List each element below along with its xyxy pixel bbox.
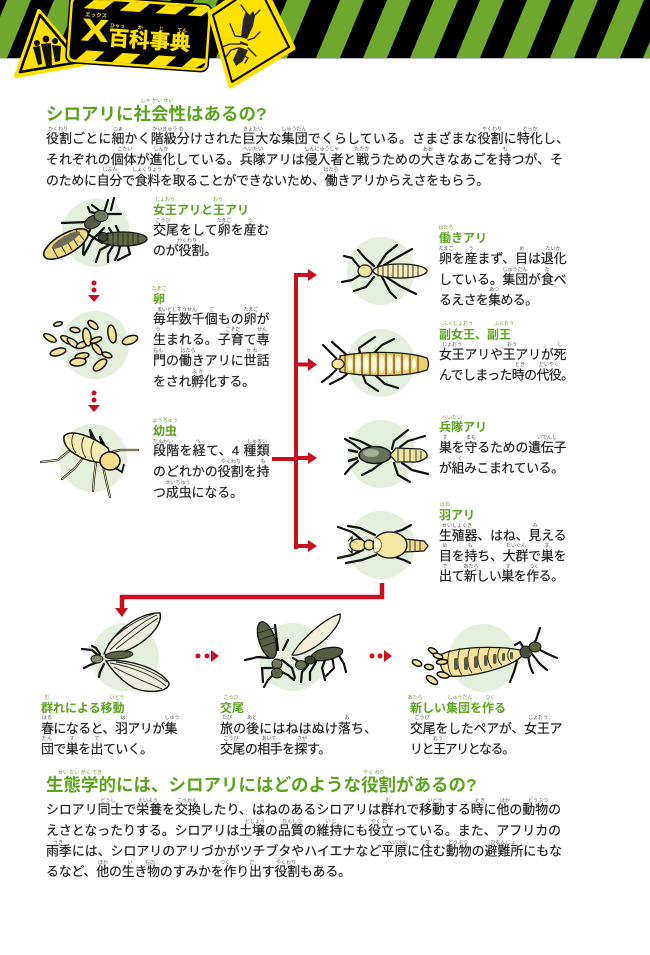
description (153, 438, 270, 500)
arrow: egg to larva (88, 390, 100, 412)
body text: い じ (325, 819, 337, 825)
heading (439, 320, 514, 342)
body text: いどう (427, 797, 443, 804)
description: こうび (155, 217, 171, 224)
body text: シロアリ同士で栄養を交換したり、はねのあるシロアリは群れで移動する時に他の動物の (46, 802, 561, 817)
intro text: それぞれの個体が進化している。兵隊アリは侵入者と戦うための大きなあごを持つが、そ (46, 152, 563, 167)
description: 毎年数千個もの卵が (153, 312, 270, 326)
icon: warning diamond with termite (210, 0, 293, 86)
description: う (155, 327, 161, 333)
description: す (505, 564, 511, 570)
panel: substitute queen and king (322, 320, 574, 397)
icon: warning triangle with group of people (16, 11, 84, 76)
heading (153, 196, 249, 217)
description: もん (153, 348, 163, 354)
description: せいしょくき (442, 522, 472, 529)
title text: エックス (85, 10, 108, 20)
description: う (247, 218, 253, 224)
icon: queen laying eggs (411, 624, 557, 692)
icon: winged termite (338, 511, 428, 579)
heading: やく わり (363, 769, 385, 776)
description: 生殖器、はね、見える (439, 528, 566, 543)
description: す (544, 543, 550, 549)
heading: 働きアリ (439, 230, 487, 245)
intro text: じぶん (102, 167, 118, 173)
description (410, 714, 562, 756)
description: み (532, 523, 538, 529)
body text: ほか (500, 797, 510, 804)
body text: む (385, 798, 391, 804)
title text: てん (177, 28, 187, 34)
heading: 幼虫 (153, 423, 177, 438)
intro text: きょだい (243, 126, 263, 132)
description: しゅるい (247, 439, 267, 445)
intro text (46, 126, 569, 188)
heading: じょおう (155, 196, 175, 203)
heading: シロアリに社会性はあるの? (46, 104, 267, 124)
heading: 羽アリ (439, 508, 475, 522)
heading: 兵隊アリ (439, 419, 487, 434)
intro text: と (175, 167, 181, 173)
intro text: はたら (324, 167, 338, 173)
heading (439, 225, 487, 245)
intro text: しんか (153, 146, 169, 152)
body text: 雨季には、シロアリのアリづかがツチブタやハイエナなど平原に住む動物の避難所にもな (46, 844, 562, 858)
intro text: かいきゅう わ (152, 126, 184, 132)
description: せん (257, 327, 267, 333)
intro text: かくわり (48, 126, 68, 132)
description: たまご (439, 245, 453, 252)
description: だいやく (539, 361, 559, 368)
body text: えいよう (138, 798, 158, 804)
description: 交尾をしたペアが、女王ア (410, 721, 562, 736)
heading: はたら (439, 225, 453, 231)
body text: るなど、他の生き物のすみかを作り出す役割もある。 (46, 864, 351, 879)
description (439, 435, 567, 476)
body text: どうぶつ (448, 839, 468, 846)
icon: larva (41, 424, 138, 497)
heading: ふくおう (494, 320, 514, 327)
heading: 交尾 (220, 701, 244, 715)
heading: たまご (152, 285, 166, 292)
icon: soldier termite (345, 420, 428, 488)
description: のが役割。 (153, 243, 217, 258)
heading: 副女王、副王 (439, 326, 511, 342)
description: せ わ (246, 347, 258, 354)
body text: とき (475, 797, 485, 804)
arrow: queen to egg (88, 280, 100, 302)
description: おう (507, 341, 517, 348)
description: たび (222, 714, 232, 721)
intro text: も (502, 146, 508, 152)
heading (152, 418, 178, 438)
description: 春になると、羽アリが集 (41, 721, 178, 736)
description: とき (515, 361, 525, 368)
arrow: larva branches to four castes (272, 269, 317, 552)
description: 門の働きアリに世話 (153, 353, 270, 368)
description: が組みこまれている。 (439, 460, 564, 476)
description: つ成虫になる。 (153, 485, 243, 500)
arrow: swarm to mating (196, 650, 219, 662)
description: し (557, 342, 563, 348)
description: つく (529, 564, 539, 570)
description: たいぐん (506, 543, 526, 549)
description: は (120, 715, 126, 721)
body text: えさとなったりする。シロアリは土壌の品質の維持にも役立っている。また、アフリカの (46, 823, 561, 838)
description (153, 217, 270, 258)
body text: やくわり (276, 859, 296, 866)
description: 巣を守るための遺伝子 (439, 440, 567, 455)
description: 団で巣を出ていく。 (41, 742, 153, 756)
description: やくわり (221, 458, 241, 465)
description: 女王アリや王アリが死 (439, 347, 567, 362)
heading (220, 694, 244, 715)
description: 段階を経て、4 種類 (153, 443, 270, 458)
heading: 生態学的には、シロアリにはどのような役割があるの? (46, 775, 477, 795)
description: 卵を産まず、目は退化 (439, 251, 567, 266)
description: こうび (414, 714, 430, 721)
title text: か (138, 24, 143, 31)
heading (407, 695, 506, 715)
description: るえさを集める。 (439, 292, 538, 308)
title text: じ (159, 26, 164, 33)
body text: うき (53, 839, 63, 846)
description: せいちゅう (165, 480, 191, 486)
title text: X (81, 12, 110, 49)
heading: ようちゅう (152, 418, 178, 424)
heading: 女王アリと王アリ (153, 202, 249, 217)
description: 交尾の相手を探す。 (220, 742, 331, 756)
heading: こうび (223, 694, 239, 701)
description (153, 306, 270, 389)
heading: しゃ かい せい (141, 97, 173, 104)
intro text: こたい (117, 146, 133, 152)
description: だんかい (153, 438, 173, 445)
body text: す (425, 840, 431, 846)
heading: 群れによる移動 (41, 700, 125, 715)
description (439, 245, 567, 308)
description: たまご (217, 217, 231, 224)
description: う (468, 246, 474, 252)
description: こそだ (225, 326, 241, 333)
description: じょおう (528, 714, 548, 721)
description: で (94, 736, 100, 742)
intro text: やくわり (482, 126, 502, 132)
description: たいか (545, 245, 561, 252)
icon: queen and king termites (39, 198, 147, 267)
description: いでんし (537, 435, 557, 441)
description (439, 341, 574, 382)
body text: へいげん (387, 839, 407, 846)
heading: しゅうだん (447, 695, 473, 701)
description: へ (195, 439, 201, 445)
intro text: のために自分で食料を取ることができないため、働きアリからえさをもらう。 (46, 173, 489, 188)
description: こ (209, 307, 215, 313)
icon: winged termite in flight (82, 613, 169, 691)
body text: もの (145, 860, 155, 866)
description: く (457, 456, 463, 462)
description (41, 715, 180, 756)
title sign (65, 0, 213, 73)
panel: egg (42, 285, 270, 389)
heading: ふくじょおう (443, 320, 473, 327)
description: たまご (244, 306, 258, 313)
intro text: おお (423, 146, 433, 152)
description: ふ か (192, 368, 204, 375)
description: め (519, 246, 525, 252)
description: す (69, 736, 75, 742)
description: あいて (262, 736, 276, 742)
description: あつ (489, 287, 499, 293)
body text (46, 797, 562, 879)
icon: eggs (42, 311, 139, 379)
icon: mating pair (245, 614, 346, 691)
body text: だ (249, 860, 255, 866)
description: も (467, 543, 473, 549)
body text: い (127, 860, 133, 866)
description: 交尾をして卵を産む (153, 222, 270, 238)
description: だん (42, 736, 52, 742)
description (220, 714, 377, 756)
header band: hazard stripes (0, 0, 650, 59)
intro text: へいたい (243, 146, 263, 152)
description: はたら (181, 348, 195, 354)
description: まいとしすうせん (157, 307, 197, 313)
panel: soldier (345, 415, 567, 488)
description: 目を持ち、大群で巣を (439, 548, 566, 564)
description: さが (297, 735, 307, 742)
description: あと (247, 715, 257, 721)
body text: やく た (371, 818, 387, 825)
description: かくわり (177, 237, 197, 244)
section: ecological role (46, 769, 562, 879)
description: 生まれる。子育て専 (153, 332, 270, 347)
panel: founding a new colony (407, 624, 562, 756)
heading: む (44, 695, 50, 701)
description (439, 522, 566, 584)
body text: ひんしつ (282, 819, 302, 825)
title text: 百科事典 (108, 27, 191, 56)
heading: へいたい (442, 415, 462, 421)
arrow: mating to new colony (370, 650, 392, 662)
description: をされ孵化する。 (153, 374, 255, 389)
intro text: たたか (354, 146, 370, 152)
description: リと王アリとなる。 (410, 742, 515, 756)
description: しゅうだん (502, 267, 528, 273)
description: している。集団が食べ (439, 272, 567, 287)
heading: 卵 (153, 291, 165, 306)
description: す (442, 435, 448, 441)
panel: larva (41, 418, 270, 500)
heading: せい たい がく てき (58, 769, 102, 776)
panel: worker (342, 225, 567, 308)
description: じょおう (442, 341, 462, 348)
heading: いどう (109, 694, 125, 701)
icon: worker termite (342, 237, 427, 305)
description: あたら (463, 564, 479, 570)
intro text: しょくりょう (132, 167, 162, 173)
body text: どうぶつ (528, 797, 548, 804)
heading: おう (213, 196, 223, 203)
description: 旅の後にはねはぬけ落ち、 (220, 721, 377, 736)
description: まも (466, 435, 476, 441)
body text: どうし (100, 797, 116, 804)
intro text: とっか (523, 126, 537, 132)
heading (152, 285, 166, 306)
heading: 新しい集団を作る (410, 700, 506, 715)
description: のどれかの役割を持 (153, 464, 270, 479)
arrow: winged termites to swarm (115, 583, 382, 617)
section: social nature of termites (46, 97, 569, 188)
body text: どじょう (245, 818, 265, 825)
icon: substitute reproductive termite (322, 329, 428, 397)
panel: swarming flight (41, 613, 180, 756)
body text: こうかん (177, 797, 197, 804)
description: お (344, 714, 350, 721)
description: こうび (223, 735, 239, 742)
description: め (442, 543, 448, 549)
intro text: 役割ごとに細かく階級分けされた巨大な集団でくらしている。さまざまな役割に特化し、 (46, 131, 569, 146)
description: も (260, 459, 266, 465)
description: た (544, 267, 550, 273)
title text (81, 10, 192, 56)
title text: ひゃっ (110, 23, 125, 30)
panel: queen and king (39, 196, 270, 267)
description: んでしまった時の代役。 (439, 368, 574, 382)
body text: つく (220, 860, 230, 866)
panel: winged termite (338, 502, 566, 584)
description: 出て新しい巣を作る。 (439, 568, 564, 584)
heading: あたら (407, 695, 423, 701)
heading: つく (485, 695, 495, 701)
heading (41, 694, 125, 715)
body text: ほか (98, 859, 108, 866)
description: はる (42, 715, 52, 721)
body text: ひなんじょ (490, 839, 516, 846)
description: で (442, 564, 448, 570)
description: しゅう (164, 715, 180, 721)
intro text: こま (113, 126, 123, 132)
heading: はね (440, 502, 450, 508)
panel: mating (220, 614, 377, 756)
intro text: しゅうだん (281, 126, 307, 132)
intro text: しんにゅうしゃ (304, 146, 340, 152)
description: おう (433, 735, 443, 742)
